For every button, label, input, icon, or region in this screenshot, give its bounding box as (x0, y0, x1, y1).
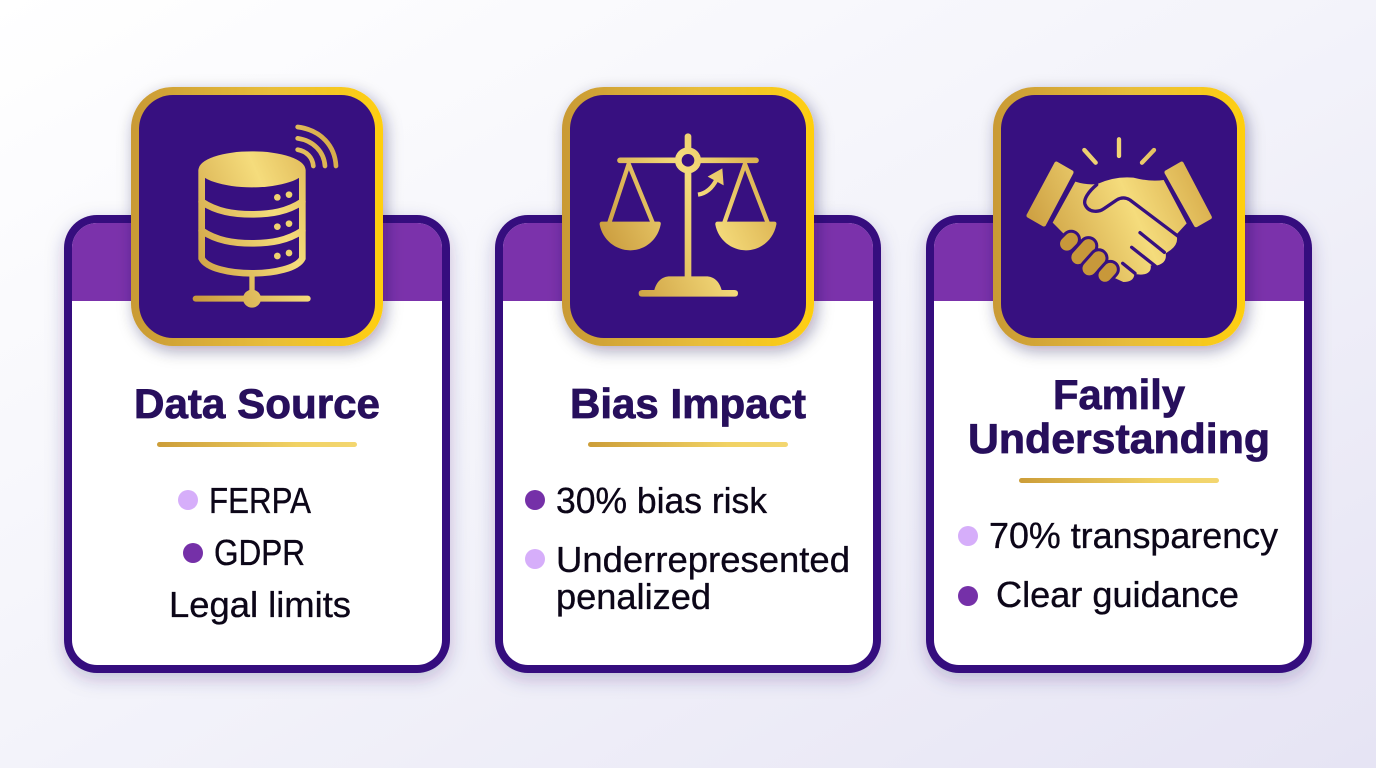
heading: data source: Data Source (134, 380, 380, 427)
bullet: GDPR (183, 532, 305, 573)
bullet: underrepresented penalized: penalized (556, 576, 711, 617)
icon: balance scale with arrow (562, 87, 814, 346)
icon: handshake (993, 87, 1245, 346)
bullet: 70% transparency: 70% transparency (989, 515, 1278, 556)
panel: bias impact (495, 87, 881, 673)
panel: family understanding (926, 87, 1312, 673)
bullet: underrepresented penalized: Underrepresented (556, 539, 850, 580)
gold rule (1019, 478, 1219, 483)
heading: family understanding: Family (1053, 371, 1186, 418)
text: legal limits: Legal limits (169, 584, 351, 625)
gold rule (588, 442, 788, 447)
heading: family understanding (968, 371, 1270, 462)
gold rule (157, 442, 357, 447)
icon: database with wireless signal (131, 87, 383, 346)
bullet: GDPR: GDPR (214, 532, 305, 573)
heading: family understanding: Understanding (968, 415, 1270, 462)
bullet: 30% bias risk: 30% bias risk (556, 480, 768, 521)
bullet: underrepresented penalized (525, 539, 850, 617)
bullet: FERPA: FERPA (209, 480, 311, 521)
heading: bias impact: Bias Impact (570, 380, 806, 427)
bullet: FERPA (178, 480, 311, 521)
panel: data source (64, 87, 450, 673)
bullet: clear guidance: Clear guidance (996, 574, 1239, 615)
